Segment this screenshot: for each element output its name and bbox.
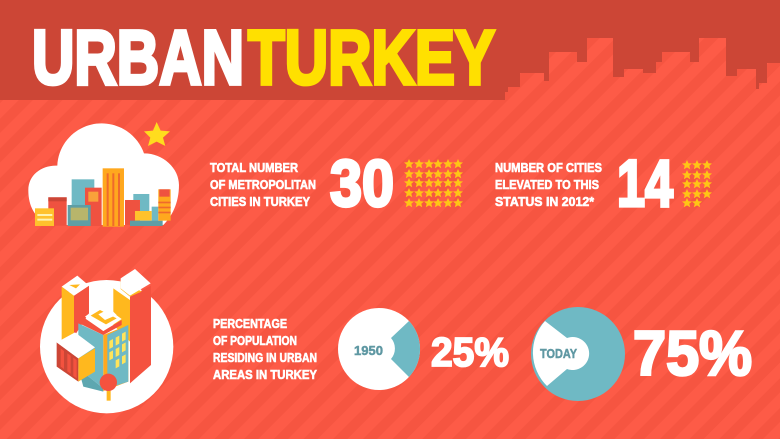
text: total metropolitan cities: TOTAL NUMBER (210, 161, 298, 175)
pie chart: 1950: 1950 (354, 343, 383, 358)
title: URBAN (32, 15, 244, 101)
text: total metropolitan cities (210, 161, 316, 209)
text: percentage of population: AREAS IN TURKEY (213, 368, 318, 382)
value: 25%: 25% (431, 329, 509, 375)
number: 30: 30 (330, 146, 394, 220)
header band with skyline (0, 0, 780, 100)
pie chart: 1950 (338, 308, 420, 390)
text: cities elevated (495, 161, 602, 209)
pie chart: today (531, 307, 625, 401)
text: cities elevated: STATUS IN 2012* (495, 195, 594, 209)
central tower (78, 304, 128, 392)
right tower (113, 269, 151, 383)
pie chart: today: TODAY (540, 346, 577, 361)
icon: star (144, 122, 170, 146)
cloud (28, 123, 179, 225)
text: cities elevated: NUMBER OF CITIES (495, 161, 602, 175)
text: percentage of population: RESIDING IN URBAN (213, 351, 317, 365)
text: percentage of population: OF POPULATION (213, 334, 297, 348)
icon: isometric buildings in ring (40, 269, 173, 413)
front block (57, 332, 95, 382)
left tower (62, 276, 89, 345)
number: 14: 14 (617, 146, 673, 220)
title (32, 15, 495, 101)
stars: 14 (682, 160, 712, 207)
tree (100, 374, 117, 401)
text: total metropolitan cities: OF METROPOLITAN (210, 178, 316, 192)
ring (40, 280, 173, 413)
title: TURKEY (248, 15, 495, 101)
buildings (35, 168, 171, 227)
value: 75%: 75% (633, 319, 752, 389)
text: percentage of population (213, 317, 318, 382)
stars: 30 (404, 159, 463, 207)
text: percentage of population: PERCENTAGE (213, 317, 287, 331)
text: total metropolitan cities: CITIES IN TURKEY (210, 195, 311, 209)
text: cities elevated: ELEVATED TO THIS (495, 178, 599, 192)
icon: city in cloud with star (28, 122, 179, 227)
